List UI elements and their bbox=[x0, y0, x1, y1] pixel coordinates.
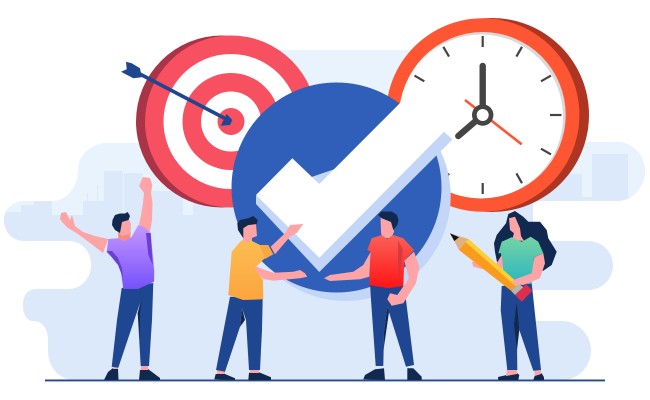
person: man in red shirt bbox=[324, 212, 422, 380]
person: woman holding pencil bbox=[450, 211, 557, 380]
arrow in target bbox=[121, 62, 232, 126]
person: man in purple shirt bbox=[60, 177, 160, 380]
ground line bbox=[45, 380, 605, 381]
clock bbox=[386, 18, 589, 212]
target bbox=[136, 36, 317, 208]
check badge bbox=[232, 82, 452, 301]
person: man in yellow shirt bbox=[214, 216, 307, 380]
